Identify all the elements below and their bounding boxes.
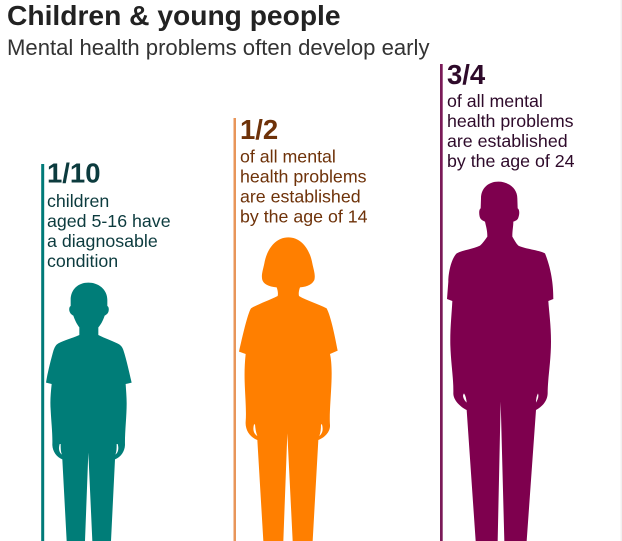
panel: 3 in 4 by age 24 [440,59,575,541]
text: children description: condition [47,251,118,271]
text: age 14 description: health problems [240,166,367,186]
text: children description: children [47,191,109,211]
text: age 24 description: of all mental [447,91,543,111]
text: age 24 description: are established [447,131,568,151]
icon: adult silhouette [447,182,553,541]
text: children description: a diagnosable [47,231,158,251]
statistic: 1/2: 1/2 [240,114,278,145]
text: age 24 description: health problems [447,111,574,131]
text: children description: aged 5-16 have [47,211,171,231]
text: age 24 description: by the age of 24 [447,151,575,171]
statistic: 1/10: 1/10 [47,158,101,188]
subtitle: Mental health problems often develop early [7,35,430,60]
icon: girl silhouette [239,237,338,541]
statistic: 3/4: 3/4 [447,59,486,90]
icon: child silhouette [46,283,132,541]
text: age 14 description: of all mental [240,146,336,166]
panel: 1 in 10 children [41,158,171,541]
text: age 14 description: are established [240,186,361,206]
panel: 1 in 2 by age 14 [234,114,368,541]
text: age 14 description: by the age of 14 [240,206,368,226]
